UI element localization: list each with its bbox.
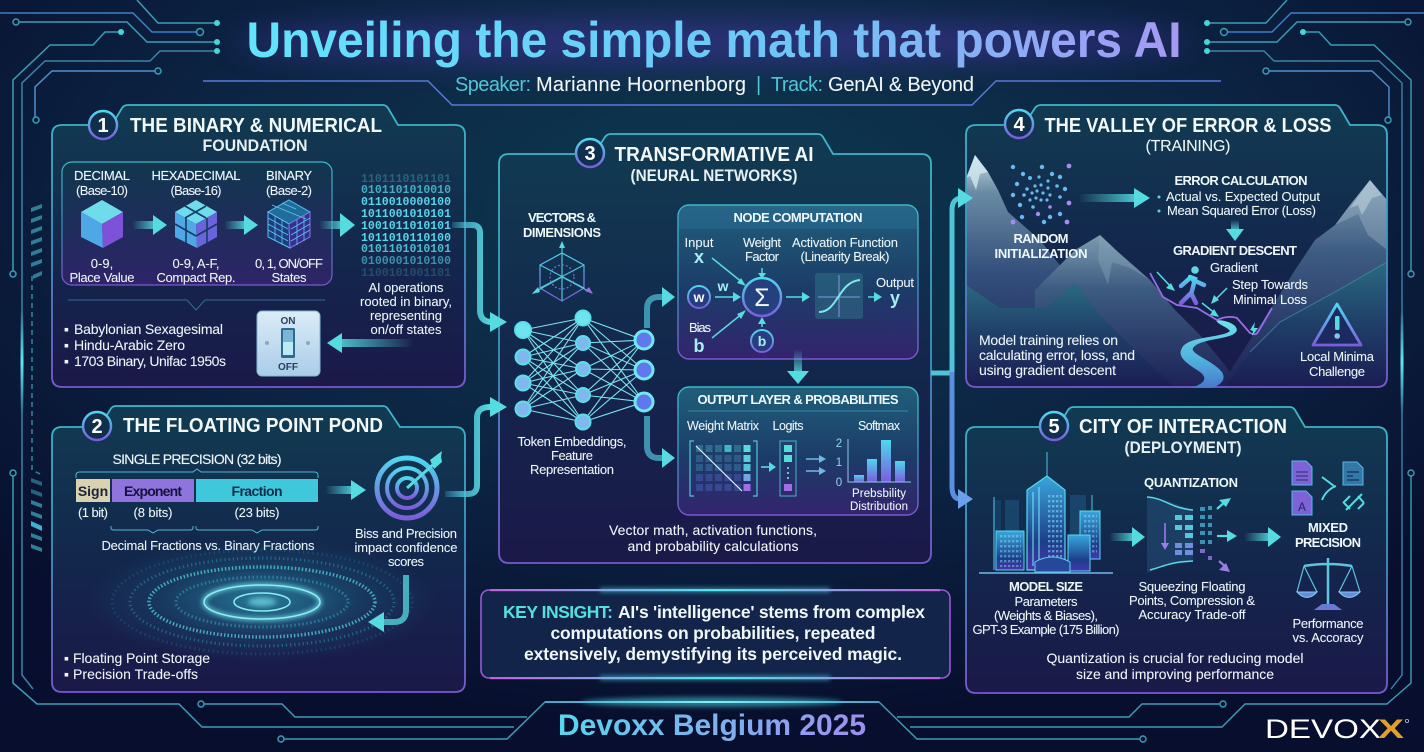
hexadecimal column: (Base-16) <box>170 183 222 198</box>
random initialization label: RANDOM <box>1014 231 1068 246</box>
heading 4: THE VALLEY OF ERROR & LOSS <box>1044 114 1332 137</box>
error calculation <box>1158 173 1320 218</box>
decimal column: 0-9, <box>91 256 113 271</box>
single precision diagram: (8 bits) <box>134 505 172 520</box>
probability chart <box>836 438 911 513</box>
sigma circle: Σ <box>754 284 770 312</box>
binary note: representing <box>370 308 442 323</box>
output layer box: OUTPUT LAYER & PROBABILITIES <box>698 392 899 407</box>
panel 5 frame <box>966 407 1387 693</box>
network label: Representation <box>530 462 614 477</box>
panel 4: valley of error and loss <box>966 105 1387 388</box>
arrow <box>133 215 167 235</box>
node computation box: NODE COMPUTATION <box>734 210 862 225</box>
icon: target <box>377 451 442 518</box>
performance label: Performance <box>1292 616 1364 631</box>
node computation box: Activation Function <box>792 235 898 250</box>
binary column: States <box>272 270 307 285</box>
icons: documents <box>1292 461 1364 515</box>
icon: vector hexagon <box>532 241 593 301</box>
binary column <box>255 168 323 285</box>
panel 1 frame <box>52 105 465 387</box>
random initialization label <box>994 231 1088 261</box>
vectors label <box>523 210 601 240</box>
heading 5: CITY OF INTERACTION <box>1079 415 1287 438</box>
probability chart: 0 <box>836 477 842 489</box>
panel 3 summary: Vector math, activation functions, <box>609 522 817 538</box>
arrow <box>326 480 366 500</box>
icon: balance scales <box>1297 558 1360 610</box>
panel 3: transformative AI <box>499 134 931 563</box>
key insight callout: KEY INSIGHT: <box>503 602 613 622</box>
key insight callout: AI's 'intelligence' stems from complex <box>618 602 925 622</box>
single precision diagram: (23 bits) <box>234 505 280 520</box>
probability chart: 2 <box>836 438 842 450</box>
training summary <box>979 332 1135 378</box>
number badge 4 <box>1005 110 1033 138</box>
logo: Devoxx: DEVOX <box>1265 714 1381 744</box>
fraction field <box>196 479 318 502</box>
node computation box: y <box>890 288 900 308</box>
deployment summary: size and improving performance <box>1076 666 1274 682</box>
binary column: BINARY <box>266 168 312 183</box>
subtitle: GenAI & Beyond <box>828 74 974 96</box>
deployment summary <box>1046 650 1304 682</box>
local minima label <box>1300 349 1375 379</box>
heading 5 <box>1079 415 1287 457</box>
gradient arrows <box>1157 272 1258 336</box>
key insight callout <box>481 589 950 679</box>
binary matrix: 1011010110100 <box>361 232 451 245</box>
binary matrix: 1011001010101 <box>361 208 451 221</box>
binary column: 0, 1, ON/OFF <box>255 256 323 271</box>
activation chart <box>815 273 863 319</box>
logo: Devoxx: X <box>1378 714 1404 744</box>
arrow <box>1226 220 1244 241</box>
arrow <box>1110 527 1145 547</box>
heading 1 <box>130 114 382 155</box>
mixed precision label: PRECISION <box>1295 535 1361 550</box>
logo: Devoxx <box>1265 714 1409 744</box>
history bullets: ▪ <box>64 337 69 353</box>
training summary: Model training relies on <box>979 332 1118 348</box>
probability chart: Distribution <box>850 501 908 513</box>
gradient descent <box>1173 243 1308 307</box>
history bullets <box>64 321 226 369</box>
bias circle <box>751 330 773 352</box>
arrows <box>806 455 826 475</box>
gradient descent: Gradient <box>1210 260 1258 275</box>
error calculation: Mean Squared Error (Loss) <box>1167 203 1316 218</box>
number badge 3 <box>576 139 604 167</box>
single precision diagram: (1 bit) <box>78 505 108 520</box>
number badge 2: 2 <box>91 416 103 438</box>
single precision diagram: Decimal Fractions vs. Binary Fractions <box>102 538 315 553</box>
history bullets: ▪ <box>64 353 69 369</box>
heading 3 <box>614 143 814 185</box>
exponent field <box>112 479 194 502</box>
heading 2: THE FLOATING POINT POND <box>123 414 383 437</box>
performance label <box>1292 616 1364 645</box>
probability chart: 1 <box>836 457 842 469</box>
exponent field: Exponent <box>124 483 182 499</box>
decimal column: (Base-10) <box>76 183 128 198</box>
icon: quantization funnel <box>1147 497 1237 573</box>
binary matrix: 1001011010101 <box>361 220 451 233</box>
number bases box <box>62 162 332 285</box>
performance label: vs. Accoracy <box>1292 630 1364 645</box>
footer glow line <box>545 697 879 707</box>
vectors label: DIMENSIONS <box>523 225 601 240</box>
error calculation: Actual vs. Expected Output <box>1166 189 1320 204</box>
panel 3 summary <box>609 522 817 554</box>
quantization note: Squeezing Floating <box>1138 579 1246 594</box>
hexadecimal column: Compact Rep. <box>156 270 236 285</box>
binary matrix: 0110010000100 <box>361 196 451 209</box>
circuit frame left <box>0 0 712 742</box>
binary note: rooted in binary, <box>360 294 452 309</box>
number badge 3: 3 <box>584 143 596 165</box>
quantization label: QUANTIZATION <box>1144 475 1238 490</box>
panel 1: binary and numerical foundation <box>52 105 465 387</box>
arrow <box>647 287 675 328</box>
number badge 1: 1 <box>97 115 109 137</box>
panel 4 frame <box>966 105 1387 387</box>
single precision diagram <box>76 451 318 553</box>
target note <box>354 526 458 569</box>
node computation box <box>678 205 918 359</box>
error calculation: ERROR CALCULATION <box>1174 173 1308 188</box>
vectors label: VECTORS & <box>528 210 596 225</box>
node computation box: b <box>694 336 704 356</box>
arrow <box>761 462 776 472</box>
divider <box>68 300 325 310</box>
output layer box: Softmax <box>858 419 901 433</box>
mixed precision label <box>1295 520 1361 550</box>
arrow <box>1245 527 1281 547</box>
history bullets: ▪ <box>64 321 69 337</box>
output layer box <box>678 387 918 515</box>
arrow <box>1080 188 1150 208</box>
model size: Parameters <box>1014 594 1078 609</box>
output layer box: Logits <box>772 419 804 433</box>
binary matrix: 0101101010101 <box>361 243 451 256</box>
single precision diagram: SINGLE PRECISION (32 bits) <box>112 451 282 467</box>
arrow <box>327 333 412 353</box>
local minima label: Local Minima <box>1300 349 1375 364</box>
heading 4: (TRAINING) <box>1146 138 1230 155</box>
output layer box: Weight Matrix <box>687 419 760 433</box>
sign field <box>76 479 110 502</box>
binary column: (Base-2) <box>266 183 312 198</box>
subtitle: Marianne Hoornenborg <box>536 74 746 96</box>
number badge 2 <box>83 412 111 440</box>
network label: Token Embeddings, <box>518 434 626 449</box>
heading 5: (DEPLOYMENT) <box>1124 438 1242 457</box>
target note: Biss and Precision <box>355 526 457 541</box>
circuit frame right <box>712 0 1424 742</box>
logits vector <box>780 441 796 496</box>
history bullets: Babylonian Sexagesimal <box>74 321 223 337</box>
binary matrix: 0101101010010 <box>361 184 451 197</box>
arrow <box>320 213 355 237</box>
icon: walking person <box>1181 266 1204 303</box>
loss curve <box>1150 273 1272 334</box>
number badge 5: 5 <box>1048 416 1060 438</box>
binary note: AI operations <box>368 280 444 295</box>
title: Unveiling the simple math that powers AI <box>246 12 1182 68</box>
gradient descent: GRADIENT DESCENT <box>1173 243 1297 258</box>
icon: random initialization dots <box>1011 164 1071 224</box>
footer title: Devoxx Belgium 2025 <box>558 709 866 742</box>
model size: MODEL SIZE <box>1009 579 1083 594</box>
weight circle: w <box>693 289 705 305</box>
weight circle <box>688 286 710 308</box>
decimal column <box>70 168 134 285</box>
node computation box: Output <box>876 275 914 290</box>
panel 4 outline <box>966 105 1387 387</box>
illustration: pond ripples <box>87 538 437 662</box>
binary matrix: 1101110101101 <box>361 173 451 186</box>
binary matrix: 0100001010100 <box>361 255 451 268</box>
arrow <box>787 350 809 384</box>
pond bullets: Precision Trade-offs <box>73 666 198 682</box>
heading 1: THE BINARY & NUMERICAL <box>130 114 382 137</box>
sigma circle <box>743 278 781 316</box>
weight matrix <box>690 441 757 496</box>
binary note <box>360 280 452 337</box>
model size: GPT-3 Example (175 Billion) <box>972 622 1120 637</box>
icon: on/off switch: OFF <box>278 362 298 373</box>
heading 1: FOUNDATION <box>202 136 308 155</box>
number badge 1 <box>89 111 117 139</box>
icon: warning triangle <box>1313 304 1361 345</box>
gradient descent: Step Towards <box>1232 277 1308 292</box>
random initialization label: INITIALIZATION <box>994 246 1088 261</box>
node computation box: x <box>694 247 704 267</box>
title glow <box>232 18 1192 66</box>
training summary: calculating error, loss, and <box>979 347 1135 363</box>
gradient descent: Minimal Loss <box>1233 292 1308 307</box>
model size <box>972 579 1120 637</box>
connector: target to network <box>445 397 507 494</box>
sign field: Sign <box>78 483 108 499</box>
mixed precision label: MIXED <box>1308 520 1348 535</box>
quantization note: Points, Compression & <box>1129 593 1255 608</box>
hexadecimal column: HEXADECIMAL <box>152 168 240 183</box>
mountains <box>966 155 1387 387</box>
subtitle: | <box>756 74 761 96</box>
heading 4 <box>1044 114 1332 155</box>
connector: binary to network <box>452 225 507 332</box>
pond bullets: ▪ <box>64 650 69 666</box>
history bullets: 1703 Binary, Unifac 1950s <box>74 353 226 369</box>
history bullets: Hindu-Arabic Zero <box>74 337 185 353</box>
hexadecimal column <box>152 168 240 285</box>
network label <box>518 434 626 477</box>
panel 3 summary: and probability calculations <box>628 538 798 554</box>
quantization note <box>1129 579 1255 622</box>
fraction field: Fraction <box>232 483 282 499</box>
target note: scores <box>388 554 424 569</box>
panel 3 frame <box>499 134 931 563</box>
number badge 4: 4 <box>1013 114 1025 136</box>
node computation box: Factor <box>745 249 780 264</box>
arrow <box>368 575 406 632</box>
heading 3: (NEURAL NETWORKS) <box>630 166 798 185</box>
key insight callout: extensively, demystifying its perceived magic. <box>524 644 902 664</box>
deployment summary: Quantization is crucial for reducing model <box>1046 650 1304 666</box>
number badge 5 <box>1040 412 1068 440</box>
river <box>1181 320 1237 388</box>
pond bullets: Floating Point Storage <box>73 650 210 666</box>
binary note: on/off states <box>370 322 442 337</box>
node computation box: Weight <box>743 235 781 250</box>
node computation box: Bias <box>689 320 712 335</box>
target note: impact confidence <box>354 540 458 555</box>
quantization note: Accuracy Trade-off <box>1138 607 1246 622</box>
arrow <box>225 215 258 235</box>
node computation box: Input <box>684 235 714 250</box>
decimal column: DECIMAL <box>74 168 130 183</box>
subtitle <box>455 74 974 96</box>
neural network diagram <box>515 310 653 430</box>
illustration: city <box>979 452 1113 573</box>
decimal column: Place Value <box>70 270 134 285</box>
panel 5: city of interaction <box>966 407 1387 693</box>
bias circle: b <box>758 333 766 349</box>
icons: documents: A <box>1298 500 1306 514</box>
binary matrix <box>361 173 451 280</box>
node arrows <box>712 258 882 338</box>
connector: network to training and deployment <box>931 188 973 509</box>
pond bullets <box>64 650 210 682</box>
training summary: using gradient descent <box>979 362 1116 378</box>
arrow <box>647 416 675 468</box>
side hatch marks <box>31 204 42 552</box>
icon: on/off switch: ON <box>280 316 296 327</box>
probability chart: Prebsbility <box>852 488 906 500</box>
node computation box: (Linearity Break) <box>800 249 890 264</box>
panel 2: floating point pond <box>52 406 465 692</box>
subtitle: Track: <box>771 74 823 96</box>
model size: (Weights & Biases), <box>994 608 1098 623</box>
panel 2 frame <box>52 406 465 692</box>
key insight callout: computations on probabilities, repeated <box>550 623 876 643</box>
binary matrix: 1100101001101 <box>361 267 451 280</box>
pond bullets: ▪ <box>64 666 69 682</box>
hexadecimal column: 0-9, A-F, <box>172 256 220 271</box>
heading 3: TRANSFORMATIVE AI <box>614 143 814 166</box>
local minima label: Challenge <box>1309 364 1365 379</box>
icon: on/off switch <box>257 311 320 376</box>
node computation box: w <box>717 278 729 294</box>
subtitle: Speaker: <box>455 74 531 96</box>
network label: Feature <box>551 448 593 463</box>
